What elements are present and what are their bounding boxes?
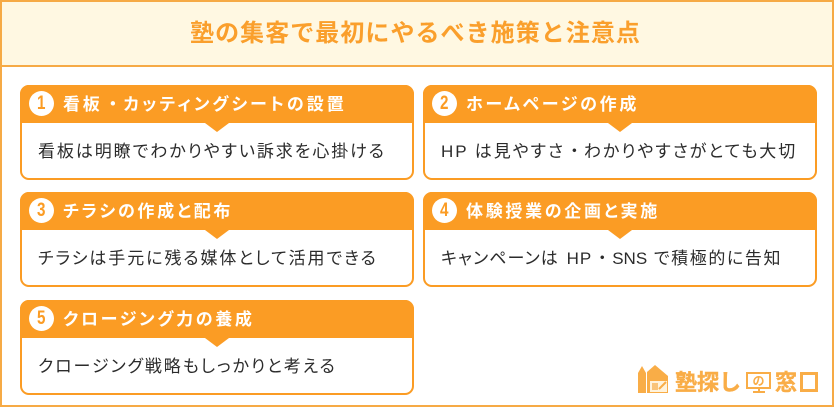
card 2 heading bar: 2 [440,93,449,114]
card 5 pointer [205,338,229,347]
card 2 heading bar: ホームページの作成 [466,95,639,114]
card 4 heading bar [423,192,817,230]
card 2 heading bar [423,85,817,123]
title: 塾の集客で最初にやるべき施策と注意点 [190,20,641,47]
card 4 heading bar: 体験授業の企画と実施 [466,202,660,221]
card 5 heading bar: クロージング力の養成 [63,310,255,329]
card 1 body text: 看板は明瞭でわかりやすい訴求を心掛ける [38,142,386,161]
logo [638,365,818,395]
logo wordmark: 窓: 窓 [775,370,797,395]
card 3 heading bar: 3 [37,200,46,221]
card 1 heading bar [20,85,414,123]
panel: card 2 [423,85,817,180]
card 4 pointer [608,230,632,239]
panel: card 3 [20,192,414,287]
card 3 heading bar [20,192,414,230]
panel: card 1 [20,85,414,180]
card 4 heading bar: 4 [440,200,449,221]
logo wordmark: 塾探し: 塾探し [675,370,741,395]
card 2 body text: HP は見やすさ わかりやすさがとても大切 [441,142,797,161]
card 3 pointer [205,230,229,239]
card 5 body text: クロージング戦略もしっかりと考える [38,357,337,376]
card 1 heading bar: 看板 カッティングシートの設置 [63,95,347,114]
card 2 body text: ・ [566,142,583,161]
card 1 pointer [205,123,229,132]
card 1 heading bar: ・ [104,95,121,114]
card 5 heading bar: 5 [37,308,46,329]
panel: card 5 [20,300,414,395]
card 5 heading bar [20,300,414,338]
panel: card 4 [423,192,817,287]
card 2 pointer [608,123,632,132]
header band [0,0,834,67]
icon: monitor with の: の [752,374,765,388]
icon: door [802,374,816,390]
icon: school house [638,365,668,393]
card 1 heading bar: 1 [37,93,46,114]
card 4 body text: ・ [594,249,611,268]
icon: monitor with の [747,373,770,393]
card 4 body text: キャンペーンは HP SNS で積極的に告知 [441,249,782,268]
card 3 body text: チラシは手元に残る媒体として活用できる [38,249,378,268]
card 3 heading bar: チラシの作成と配布 [63,202,233,221]
